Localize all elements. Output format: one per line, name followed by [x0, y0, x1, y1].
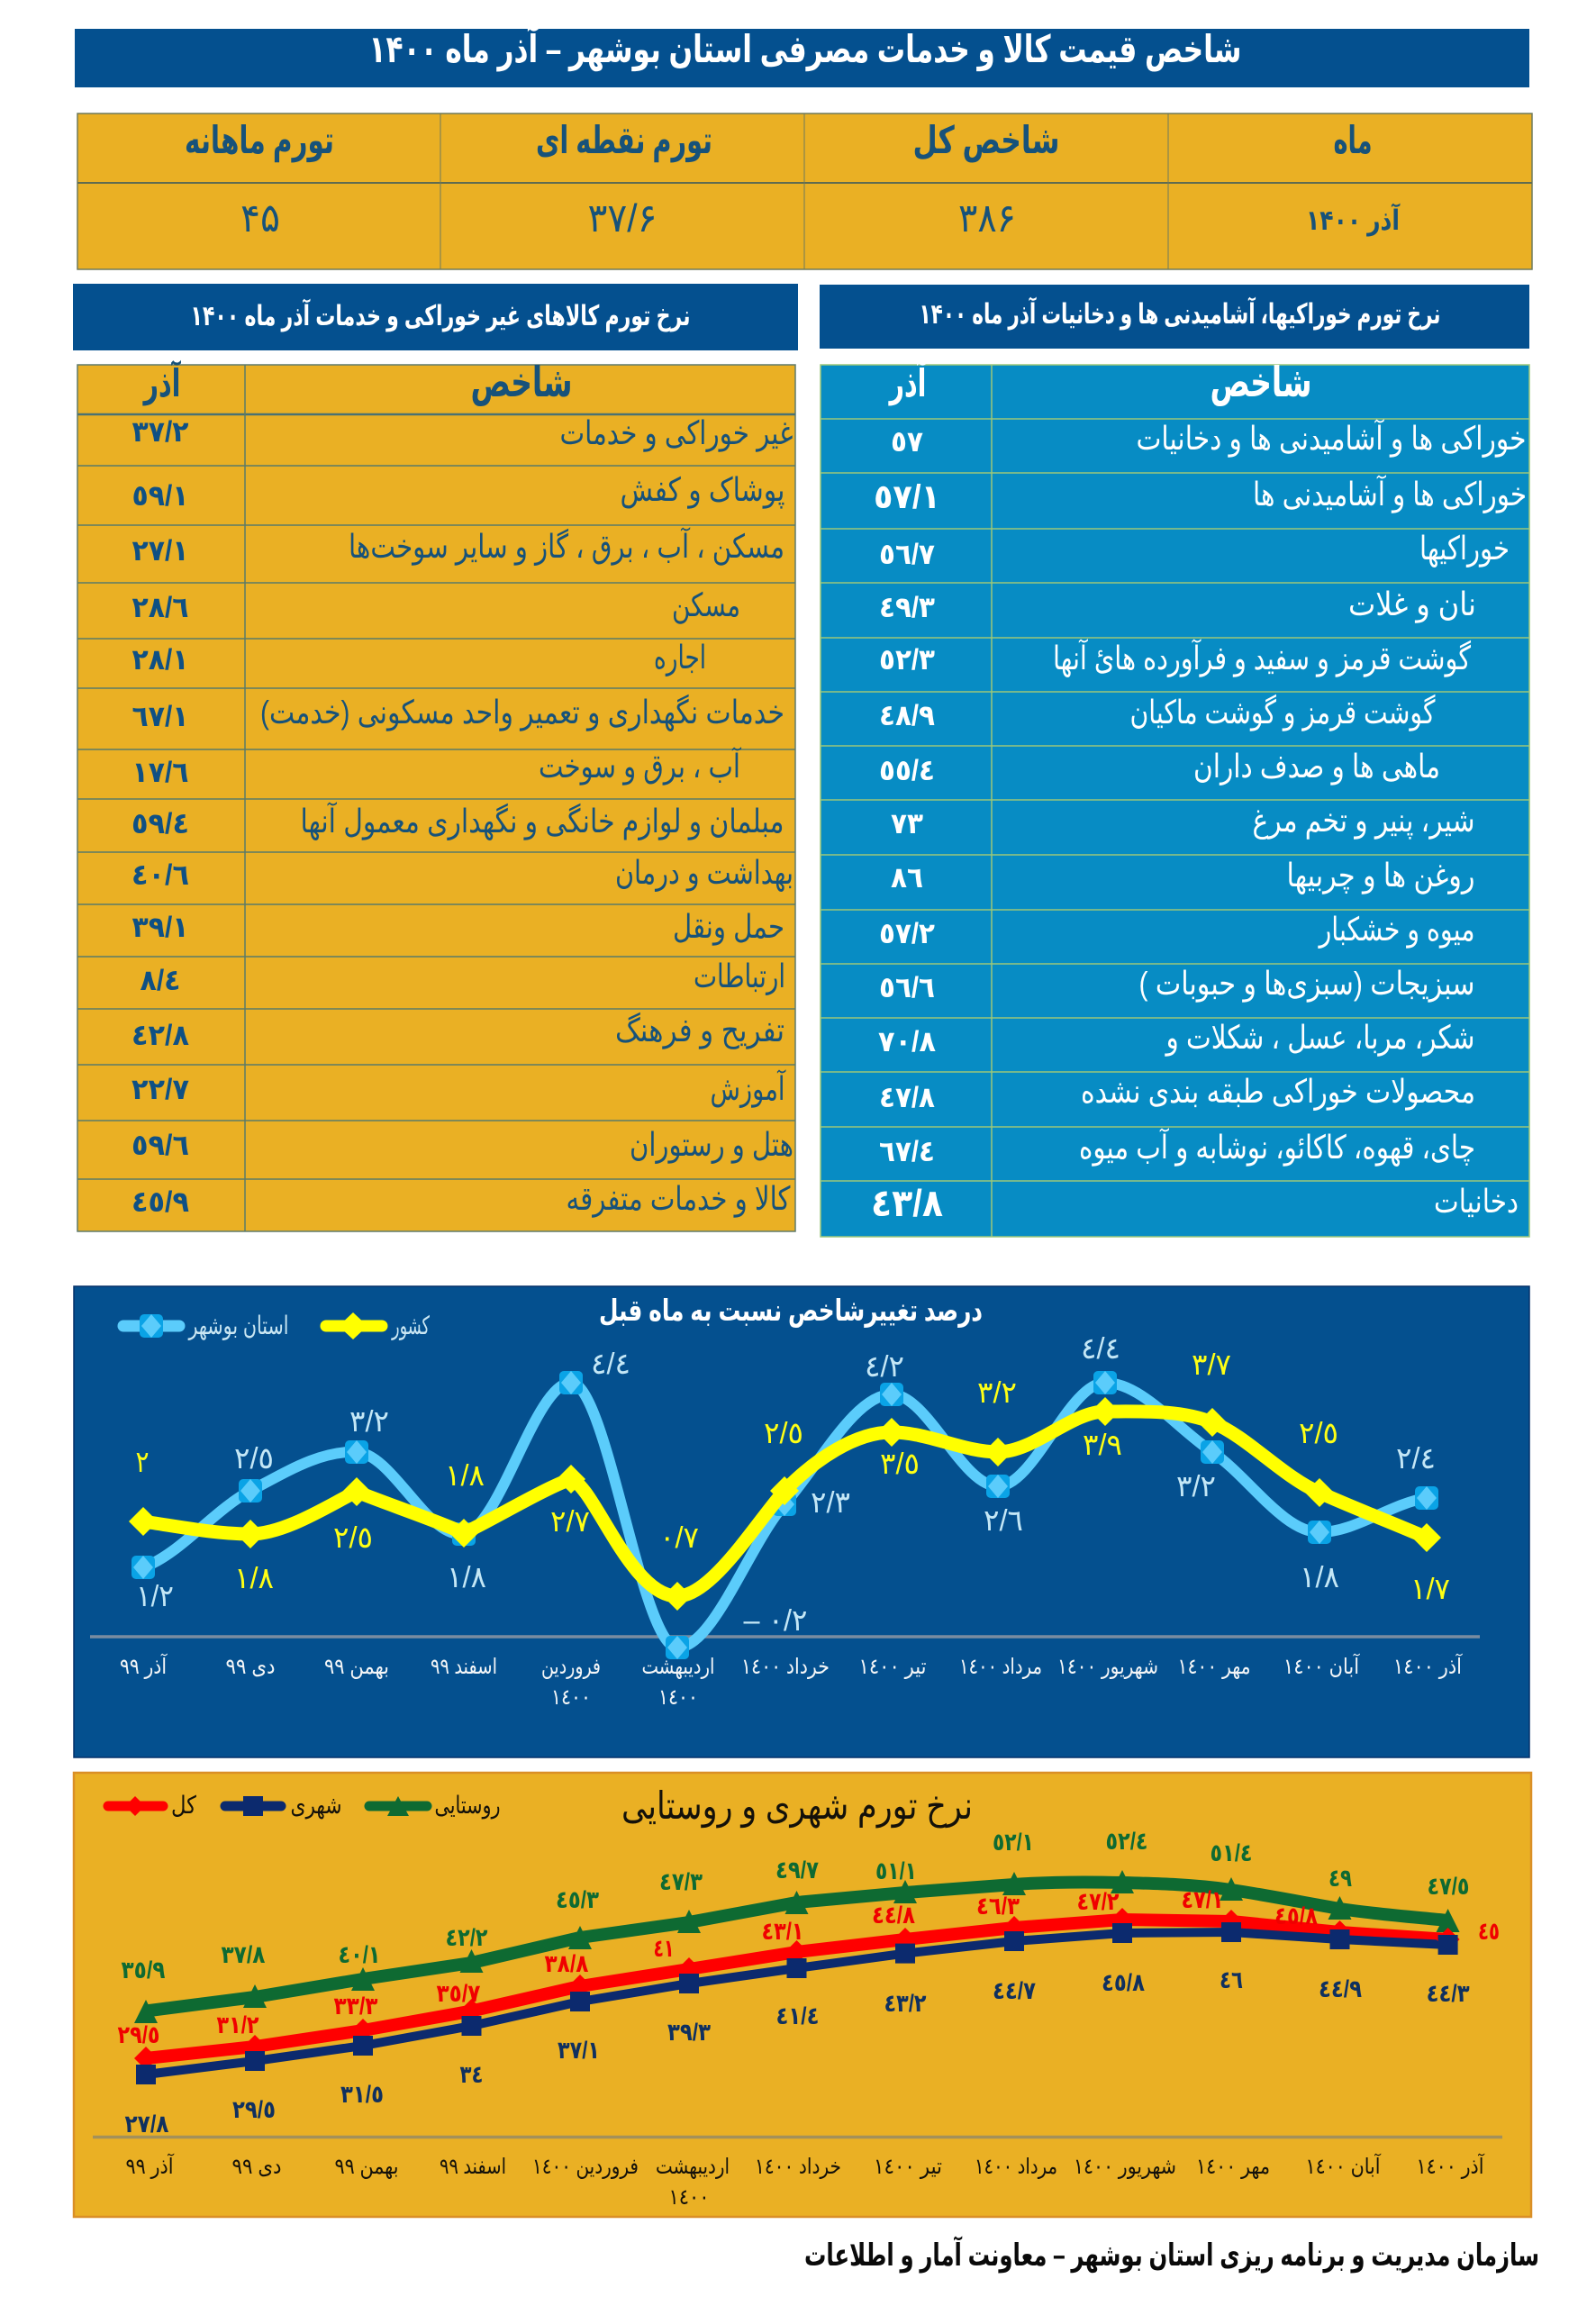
data labels: urban: ٤١/٤ [776, 2002, 820, 2029]
row [871, 1182, 1519, 1224]
line: province series [143, 1383, 1427, 1648]
heading: monthly inflation: تورم ماهانه [185, 119, 334, 163]
heading: overall index: شاخص کل [913, 119, 1059, 163]
x axis labels: آبان ١٤٠٠ [1306, 2153, 1382, 2179]
legend: total: کل [171, 1792, 196, 1819]
data labels: country: ٣/٧ [1192, 1348, 1231, 1381]
row [879, 586, 1476, 623]
data labels: province: ١/٨ [447, 1560, 486, 1593]
data labels: urban: ٤٤/٩ [1319, 1975, 1362, 2002]
row: ٤٩/٣ [879, 591, 935, 623]
data labels: rural: ٤٧/٥ [1427, 1873, 1470, 1900]
row: پوشاک و کفش [620, 471, 785, 509]
table header: آذر [142, 360, 182, 405]
row [131, 639, 706, 676]
data labels: province: – ٠/٢ [744, 1603, 807, 1637]
data labels: rural: ٤٢/٢ [445, 1924, 488, 1951]
subheading: non-food: نرخ تورم کالاهای غیر خوراکی و خدمات آذر ماه ۱۴۰۰ [191, 298, 690, 332]
row: ٢٨/١ [131, 643, 189, 676]
markers: rural series [134, 1870, 1460, 2023]
row [131, 908, 784, 946]
table header [142, 359, 573, 406]
row: ٥٧/٢ [879, 917, 935, 949]
row [879, 694, 1436, 731]
data labels: country: ٢/٥ [1299, 1416, 1338, 1449]
data labels: urban: ٤٤/٧ [993, 1977, 1036, 2004]
data labels: province: ٣/٢ [349, 1404, 389, 1438]
markers: country series [129, 1397, 1441, 1611]
value: overall index: ۳۸۶ [958, 196, 1016, 241]
row: ٣٧/٢ [131, 415, 189, 448]
row: خوراکی ها و آشامیدنی ها [1253, 474, 1527, 513]
x axis labels: مهر ١٤٠٠ [1196, 2155, 1270, 2179]
row: ٤٧/٨ [879, 1081, 935, 1113]
row: ٨/٤ [141, 964, 180, 996]
row: مسکن [672, 586, 740, 624]
row [131, 746, 742, 788]
data labels: total: ٤٧/١ [1182, 1886, 1223, 1913]
row [131, 1126, 793, 1164]
data labels: rural: ٣٥/٩ [121, 1956, 166, 1984]
row: ٢٢/٧ [131, 1073, 189, 1105]
x axis labels: شهریور ١٤٠٠ [1057, 1655, 1158, 1679]
value: monthly inflation: ۴۵ [240, 196, 280, 241]
data labels: rural: ٥٢/٤ [1106, 1828, 1147, 1855]
row: ٥٩/٤ [131, 807, 189, 840]
data labels: province: ٢/٣ [811, 1485, 850, 1519]
data labels: total: ٤٣/١ [762, 1918, 803, 1945]
row [131, 586, 740, 624]
heading: point inflation: تورم نقطه ای [536, 119, 712, 163]
row [891, 802, 1475, 840]
row [878, 1019, 1475, 1058]
row [131, 1180, 791, 1218]
x axis labels: بهمن ٩٩ [335, 2155, 398, 2179]
x axis labels: فروردین ١٤٠٠ [532, 2155, 639, 2179]
chart title: نرخ تورم شهری و روستایی [621, 1784, 973, 1829]
legend: rural [369, 1792, 501, 1820]
row: آب ، برق و سوخت [539, 746, 742, 785]
row: شیر، پنیر و تخم مرغ [1252, 802, 1475, 840]
x axis labels: تیر ١٤٠٠ [859, 1655, 926, 1679]
row: خوراکی ها و آشامیدنی ها و دخانیات [1137, 418, 1526, 458]
data labels: urban: ٤٥/٨ [1102, 1969, 1145, 1996]
data labels: rural: ٣٧/٨ [222, 1941, 266, 1968]
row: حمل ونقل [673, 908, 784, 946]
x axis labels: مرداد ١٤٠٠ [959, 1655, 1042, 1679]
row [131, 694, 784, 732]
row: ٤٢/٨ [131, 1019, 189, 1051]
panel: non-food inflation table [77, 359, 795, 1231]
row [131, 471, 785, 512]
x axis labels: اسفند ٩٩ [431, 1655, 497, 1679]
data labels: country: ٣/٢ [977, 1375, 1017, 1409]
row: ٥٢/٣ [879, 643, 935, 676]
table header: آذر [888, 360, 928, 405]
row: محصولات خوراکی طبقه بندی نشده [1081, 1073, 1475, 1111]
row [879, 911, 1475, 949]
data labels: total: ٣٨/٨ [544, 1950, 589, 1977]
data labels: rural: ٤٩/٧ [775, 1857, 819, 1884]
x axis labels: آذر ٩٩ [120, 1653, 168, 1679]
row: ٤٣/٨ [871, 1182, 943, 1224]
x axis labels: اردیبهشت [656, 2155, 730, 2179]
x axis labels: مرداد ١٤٠٠ [975, 2155, 1057, 2179]
table header: شاخص [470, 359, 573, 406]
x axis labels: شهریور ١٤٠٠ [1074, 2155, 1176, 2179]
data labels: province: ٤/٤ [1081, 1331, 1120, 1365]
subheading: non-food [73, 284, 798, 350]
x axis labels: فروردین [541, 1655, 601, 1679]
row: اجاره [654, 639, 706, 676]
row: خوراکیها [1419, 530, 1510, 567]
row: گوشت قرمز و گوشت ماکیان [1129, 694, 1436, 731]
x axis labels: ١٤٠٠ [658, 1685, 698, 1710]
legend: country: کشور [391, 1312, 430, 1340]
row [141, 958, 785, 996]
row: شکر، مربا، عسل ، شکلات و [1165, 1019, 1475, 1057]
data labels: urban: ٢٧/٨ [124, 2111, 169, 2138]
data labels: urban: ٤٦ [1220, 1966, 1243, 1993]
data labels: total: ٤٥ [1478, 1918, 1500, 1945]
row [131, 854, 793, 892]
row: ٣٩/١ [131, 911, 189, 943]
data labels: urban: ٤٣/٢ [884, 1990, 927, 2017]
data labels: country: ٣/٩ [1083, 1428, 1122, 1461]
row: تفریح و فرهنگ [615, 1012, 784, 1049]
x axis labels: آذر ٩٩ [126, 2153, 175, 2179]
data labels: urban: ٢٩/٥ [232, 2096, 276, 2123]
data labels: urban [124, 1966, 1470, 2138]
table header: شاخص [1211, 359, 1311, 406]
data labels: rural [121, 1828, 1470, 1984]
row: ٤٥/٩ [131, 1185, 189, 1218]
row [131, 526, 784, 567]
legend: country [326, 1312, 430, 1340]
legend: province [123, 1312, 288, 1340]
data labels: total: ٤٥/٨ [1274, 1902, 1318, 1929]
legend: urban [225, 1792, 342, 1820]
x axis labels: خرداد ١٤٠٠ [741, 1655, 830, 1679]
row: آموزش [710, 1068, 786, 1108]
data labels: rural: ٤٠/١ [339, 1941, 380, 1968]
data labels: rural: ٥١/٤ [1211, 1839, 1252, 1866]
row [891, 857, 1475, 894]
data labels: rural: ٤٧/٣ [659, 1868, 703, 1895]
row: گوشت قرمز و سفید و فرآورده هائ آنها [1053, 638, 1472, 677]
data labels: rural: ٤٥/٣ [556, 1886, 599, 1913]
data labels: country: ٢ [135, 1445, 150, 1478]
data labels: province [136, 1331, 1436, 1637]
table header [888, 359, 1311, 406]
data labels: total: ٤٤/٨ [872, 1902, 915, 1929]
data labels: province: ٢/٥ [234, 1441, 274, 1475]
row: ٥٩/١ [131, 479, 189, 512]
row: خدمات نگهداری و تعمیر واحد مسکونی (خدمت) [260, 694, 784, 731]
line: rural series [146, 1882, 1448, 2011]
row: ٢٨/٦ [131, 591, 189, 623]
markers: urban series [136, 1922, 1458, 2084]
row [879, 530, 1510, 570]
line: total series [146, 1920, 1448, 2058]
row: سبزیجات (سبزی‌ها و حبوبات ) [1138, 965, 1475, 1003]
data labels: total: ٤٧/٢ [1077, 1888, 1120, 1915]
x axis labels: آذر ١٤٠٠ [1416, 2153, 1485, 2179]
data labels: province: ١/٨ [1300, 1560, 1339, 1593]
data labels: province: ١/٢ [136, 1579, 174, 1612]
data labels: country [135, 1348, 1450, 1605]
heading: month: ماه [1333, 119, 1373, 161]
row: میوه و خشکبار [1318, 911, 1475, 949]
row [131, 1068, 786, 1108]
data labels: country: ٢/٧ [550, 1504, 590, 1538]
data labels: total: ٤٦/٣ [976, 1893, 1020, 1920]
x axis labels: اردیبهشت [641, 1655, 715, 1679]
x axis labels: آبان ١٤٠٠ [1283, 1653, 1360, 1679]
data labels: rural: ٥٢/١ [993, 1829, 1034, 1856]
row: دخانیات [1434, 1183, 1519, 1220]
row: مسکن ، آب ، برق ، گاز و سایر سوخت‌ها [349, 526, 784, 566]
row [874, 474, 1527, 515]
row: غیر خوراکی و خدمات [560, 414, 793, 452]
data labels: urban: ٤٤/٣ [1427, 1980, 1470, 2007]
subheading: food [820, 285, 1529, 349]
row: روغن ها و چربیها [1286, 857, 1475, 894]
row: ٥٦/٧ [879, 538, 935, 570]
data labels: total: ٣٣/٣ [333, 1993, 378, 2020]
row: بهداشت و درمان [615, 854, 793, 892]
legend: rural: روستایی [434, 1792, 501, 1820]
row: ١٧/٦ [131, 756, 189, 788]
value: month: آذر ۱۴۰۰ [1306, 203, 1401, 237]
row [131, 414, 793, 452]
row: ٢٧/١ [131, 534, 189, 567]
data labels: country: ٠/٧ [659, 1521, 699, 1554]
x axis labels: تیر ١٤٠٠ [874, 2155, 942, 2179]
x axis labels: دی ٩٩ [225, 1655, 276, 1679]
row: ٧٣ [891, 807, 923, 840]
row: ماهی ها و صدف داران [1193, 748, 1440, 785]
row: هتل و رستوران [630, 1126, 793, 1164]
row: نان و غلات [1348, 586, 1476, 623]
summary table [77, 113, 1532, 269]
data labels: province: ٢/٦ [984, 1503, 1023, 1537]
data labels: rural: ٤٩ [1328, 1865, 1352, 1892]
x axis labels: دی ٩٩ [232, 2155, 281, 2179]
legend: urban: شهری [290, 1792, 342, 1820]
row: ٥٧ [891, 425, 923, 458]
row [879, 748, 1440, 786]
markers: total series [134, 1908, 1460, 2070]
row: ٥٥/٤ [879, 754, 935, 786]
data labels: province: ٢/٤ [1396, 1441, 1436, 1475]
data labels: country: ١/٧ [1410, 1572, 1450, 1605]
row: ٦٧/١ [131, 700, 189, 732]
x axis labels: بهمن ٩٩ [324, 1655, 389, 1679]
row [131, 801, 784, 840]
legend: province: استان بوشهر [187, 1312, 288, 1340]
data labels: urban: ٣٤ [459, 2061, 483, 2088]
row: ٥٩/٦ [131, 1129, 189, 1161]
value: point inflation: ۳۷/۶ [587, 196, 657, 241]
line: country series [143, 1412, 1427, 1596]
row: ٤٨/٩ [879, 699, 935, 731]
data labels: province: ٤/٢ [865, 1349, 904, 1383]
panel: food inflation table [821, 359, 1529, 1237]
x axis labels [120, 1653, 1463, 1710]
title banner [75, 26, 1529, 87]
row: مبلمان و لوازم خانگی و نگهداری معمول آنها [301, 801, 784, 840]
panel: monthly change chart [74, 1286, 1529, 1757]
data labels: total: ٣١/٢ [216, 2011, 259, 2038]
row [879, 1073, 1475, 1113]
x axis labels: خرداد ١٤٠٠ [755, 2155, 841, 2179]
x axis labels: ١٤٠٠ [668, 2185, 710, 2210]
row: ٦٧/٤ [879, 1135, 935, 1167]
row: ٥٦/٦ [879, 971, 935, 1003]
data labels: country: ٣/٥ [880, 1447, 920, 1480]
row [879, 965, 1475, 1003]
data labels: total: ٣٥/٧ [436, 1980, 481, 2007]
data labels: country: ٢/٥ [764, 1416, 803, 1449]
panel: urban and rural inflation chart [74, 1773, 1531, 2217]
data labels: total: ٢٩/٥ [117, 2021, 160, 2048]
data labels: urban: ٣٧/١ [558, 2037, 600, 2064]
row [131, 1012, 784, 1051]
line: urban series [146, 1932, 1448, 2074]
data labels: total: ٤١ [654, 1935, 674, 1962]
title banner: شاخص قیمت کالا و خدمات مصرفی استان بوشهر – آذر ماه ۱۴۰۰ [369, 26, 1241, 72]
row [879, 1127, 1475, 1167]
data labels: urban: ٣٩/٣ [667, 2019, 711, 2046]
chart title: درصد تغییرشاخص نسبت به ماه قبل [599, 1294, 983, 1329]
row: چای، قهوه، کاکائو، نوشابه و آب میوه [1079, 1127, 1475, 1167]
data labels: country: ٢/٥ [333, 1521, 373, 1554]
data labels: province: ٤/٤ [591, 1347, 630, 1380]
data labels: country: ١/٨ [445, 1458, 485, 1492]
x axis labels: ١٤٠٠ [551, 1685, 591, 1710]
row: ارتباطات [694, 958, 785, 995]
legend: total [108, 1792, 196, 1819]
data labels: urban: ٣١/٥ [340, 2081, 384, 2108]
row: کالا و خدمات متفرقه [566, 1180, 791, 1218]
row: ٥٧/١ [874, 478, 940, 515]
row: ٤٠/٦ [131, 858, 189, 891]
data labels: country: ١/٨ [234, 1561, 274, 1594]
x axis labels [126, 2153, 1485, 2210]
x axis labels: آذر ١٤٠٠ [1393, 1653, 1463, 1679]
markers: province series [131, 1371, 1438, 1659]
data labels: province: ٣/٢ [1176, 1469, 1216, 1503]
row [891, 418, 1526, 458]
row: ٧٠/٨ [878, 1025, 936, 1058]
data labels: total [117, 1886, 1500, 2048]
data labels: rural: ٥١/١ [875, 1857, 917, 1884]
x axis labels: اسفند ٩٩ [440, 2155, 506, 2179]
row: ٨٦ [891, 861, 923, 894]
row [879, 638, 1472, 677]
x axis labels: مهر ١٤٠٠ [1178, 1655, 1250, 1679]
